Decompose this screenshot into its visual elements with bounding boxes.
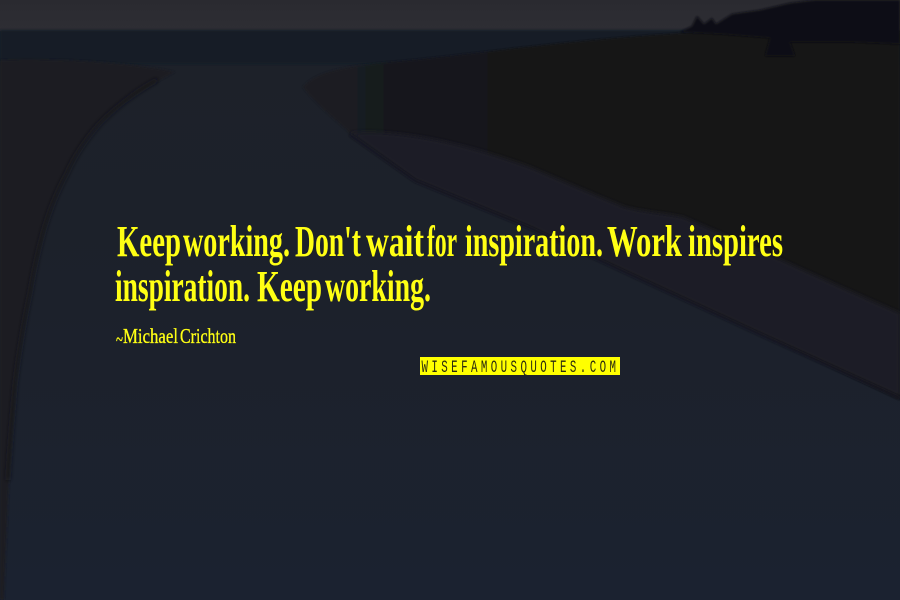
quote line 2 (115, 262, 431, 311)
left shore (0, 60, 175, 600)
quote line 1: Work (607, 217, 682, 266)
wisefamousquotes badge: WISEFAMOUSQUOTES.COM (422, 359, 619, 378)
author attribution (116, 324, 236, 351)
quote text (115, 217, 783, 311)
quote line 1: inspires (688, 217, 783, 266)
author attribution: ~ (116, 327, 123, 351)
quote line 1: wait (366, 217, 424, 266)
quote line 2: Keep (257, 262, 322, 311)
quote line 1: working. (183, 217, 290, 266)
quote line 1: for (427, 217, 457, 266)
quote line 1: Don't (295, 217, 361, 266)
quote line 2: inspiration. (115, 262, 250, 311)
author attribution: Crichton (180, 324, 236, 348)
author attribution: Michael (123, 324, 178, 348)
quote line 1: Keep (117, 217, 181, 266)
wet sand strip (350, 132, 900, 397)
sand edge shadow (350, 135, 900, 398)
treeline (680, 0, 900, 56)
road edge shadow (8, 80, 157, 480)
quote line 1: inspiration. (465, 217, 603, 266)
sky (0, 0, 900, 31)
quote line 2: working. (325, 262, 431, 311)
right beach (303, 32, 900, 400)
quote line 1 (117, 217, 783, 266)
water band (0, 30, 900, 64)
